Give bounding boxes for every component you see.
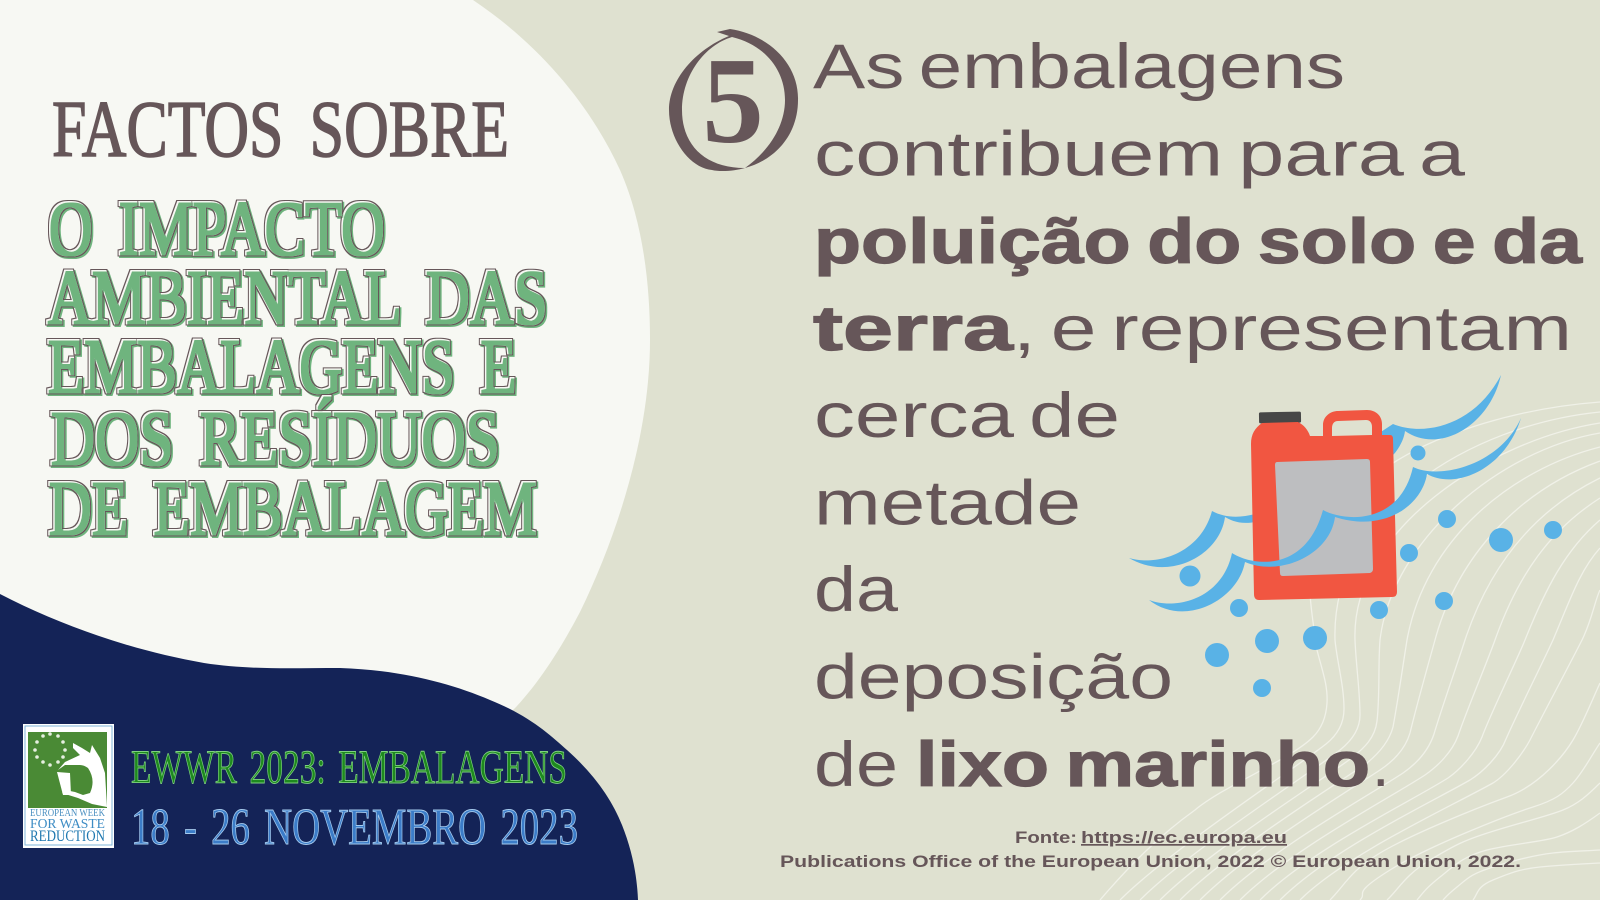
icon: EWWR logo: REDUCTION [30,828,105,845]
icon: number five in circle: 5 [702,32,764,169]
text: source [780,828,1521,871]
text: source: Publications Office of the European Union, 2022 © European Union, 2022. [780,852,1521,871]
text: event dates: 18 - 26 NOVEMBRO 2023 [131,799,578,856]
icon: wave in front of canister [1149,418,1521,611]
title: environmental impact [47,184,547,551]
text block: main statement: deposição [814,642,1173,712]
heading: factos sobre: FACTOS SOBRE [52,86,509,174]
icon: EWWR logo: EUROPEAN WEEK [30,808,106,819]
icon: number five in circle [669,29,798,171]
title: environmental impact: EMBALAGENS E [47,322,516,409]
text block: main statement: poluição do solo e da [814,207,1583,277]
icon: EWWR logo [23,724,114,848]
title: environmental impact: DE EMBALAGEM [48,464,536,551]
panel: navy blob [0,594,638,900]
text block: main statement: de [814,730,898,800]
text block: main statement: , e representam [1013,294,1572,364]
title: environmental impact: AMBIENTAL DAS [47,253,547,340]
icon: plastic canister [1251,410,1397,600]
text block: main statement: As embalagens [813,32,1345,102]
text block: main statement: terra [813,294,1014,364]
text block: main statement: lixo marinho [916,730,1370,800]
panel: white blob [0,0,650,720]
text block: main statement: metade [814,468,1081,538]
title: environmental impact: O IMPACTO [48,184,384,271]
text block: main statement: cerca de [814,381,1120,451]
text block: main statement: contribuem para a [814,120,1466,190]
text: source: Fonte: [1015,828,1077,847]
icon: water droplets [1180,446,1562,697]
icon: wave behind canister [1129,375,1501,567]
title: environmental impact: DOS RESÍDUOS [50,394,499,481]
icon: EWWR logo: FOR WASTE [30,817,105,832]
text block: main statement: da [814,555,899,625]
text block: main statement [813,32,1583,800]
text: event name: EWWR 2023: EMBALAGENS [131,741,567,794]
text block: main statement: . [1372,730,1390,800]
text: source: https://ec.europa.eu [1081,828,1287,847]
